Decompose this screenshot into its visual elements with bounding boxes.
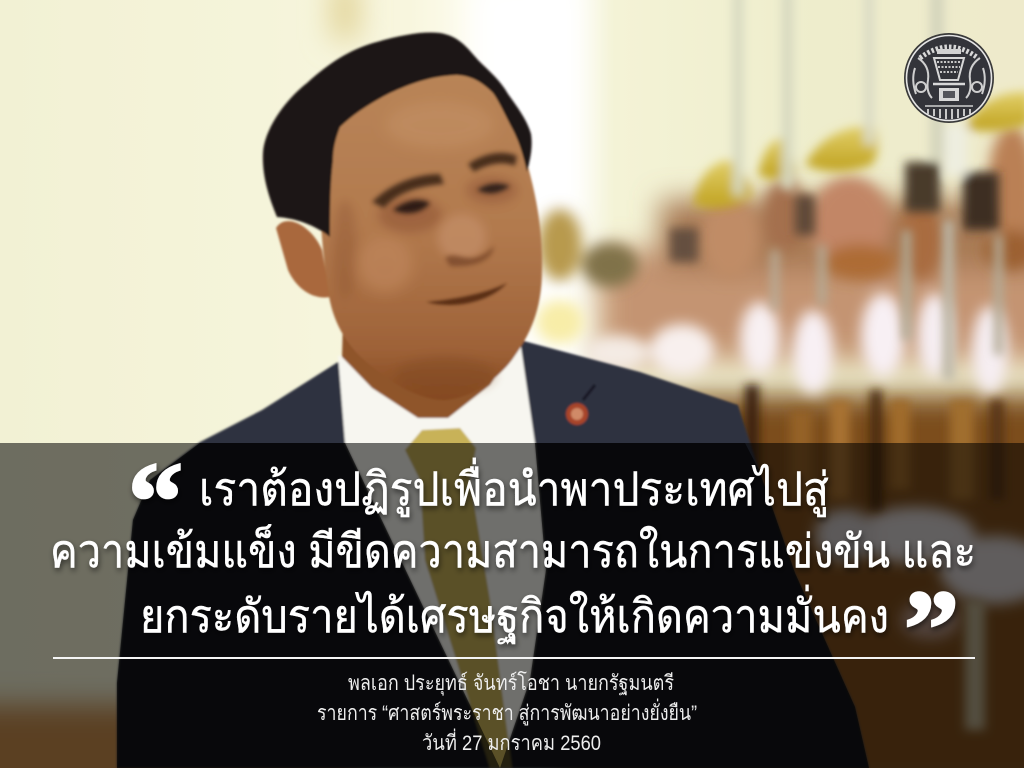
face: [319, 60, 542, 400]
jacket: [117, 340, 869, 768]
attribution text: [317, 671, 697, 755]
attribution text: รายการ “ศาสตร์พระราชา สู่การพัฒนาอย่างยั่งยืน”: [317, 698, 697, 726]
forehead highlight: [385, 101, 495, 149]
swords: [733, 0, 743, 195]
sleeves: [585, 335, 649, 371]
chin shadow: [395, 357, 495, 393]
cheek shading: [333, 200, 357, 300]
portrait figure: [117, 33, 869, 768]
face shading: [333, 101, 518, 393]
quote text: เราต้องปฏิรูปเพื่อนำพาประเทศไปสู่: [199, 457, 829, 517]
gloved hands: [855, 507, 975, 563]
neck: [342, 320, 520, 418]
seal: base ornament: [925, 106, 973, 119]
seal: central bowl: [934, 49, 964, 80]
dark caption band: [0, 443, 1024, 768]
seal: right guardian: [966, 58, 985, 98]
left brow and eye: [372, 174, 444, 213]
lapel notch: [583, 385, 595, 400]
opening quotation mark: “: [128, 440, 183, 562]
attribution text: พลเอก ประยุทธ์ จันทร์โอชา นายกรัฐมนตรี: [348, 671, 674, 696]
distant blobs: [538, 209, 582, 281]
mouth: [426, 283, 507, 305]
divider line: [53, 657, 975, 659]
hair: [263, 33, 532, 237]
lapel pin: [566, 403, 588, 425]
band darkening over the suit: [117, 443, 869, 768]
right brow and eye: [468, 153, 517, 193]
quote text: ยกระดับรายได้เศรษฐกิจให้เกิดความมั่นคง: [140, 584, 889, 644]
seal: upper flame band: [920, 47, 978, 58]
seal: pedestal: [933, 84, 965, 101]
cheek highlight: [357, 237, 413, 293]
quote text: [50, 457, 976, 644]
dark cap straps: [905, 162, 940, 212]
shirt: [338, 340, 546, 768]
attribution text: วันที่ 27 มกราคม 2560: [422, 728, 601, 755]
ear: [276, 221, 330, 297]
nose: [438, 214, 494, 266]
seal: left guardian: [913, 58, 932, 98]
soldiers' hats: [693, 160, 752, 208]
closing quotation mark: ”: [904, 568, 959, 690]
government seal: [904, 33, 994, 123]
trouser stripes: [745, 385, 759, 475]
eye sockets: [378, 197, 442, 233]
soldiers' faces: [700, 196, 760, 280]
tie: [405, 428, 512, 768]
